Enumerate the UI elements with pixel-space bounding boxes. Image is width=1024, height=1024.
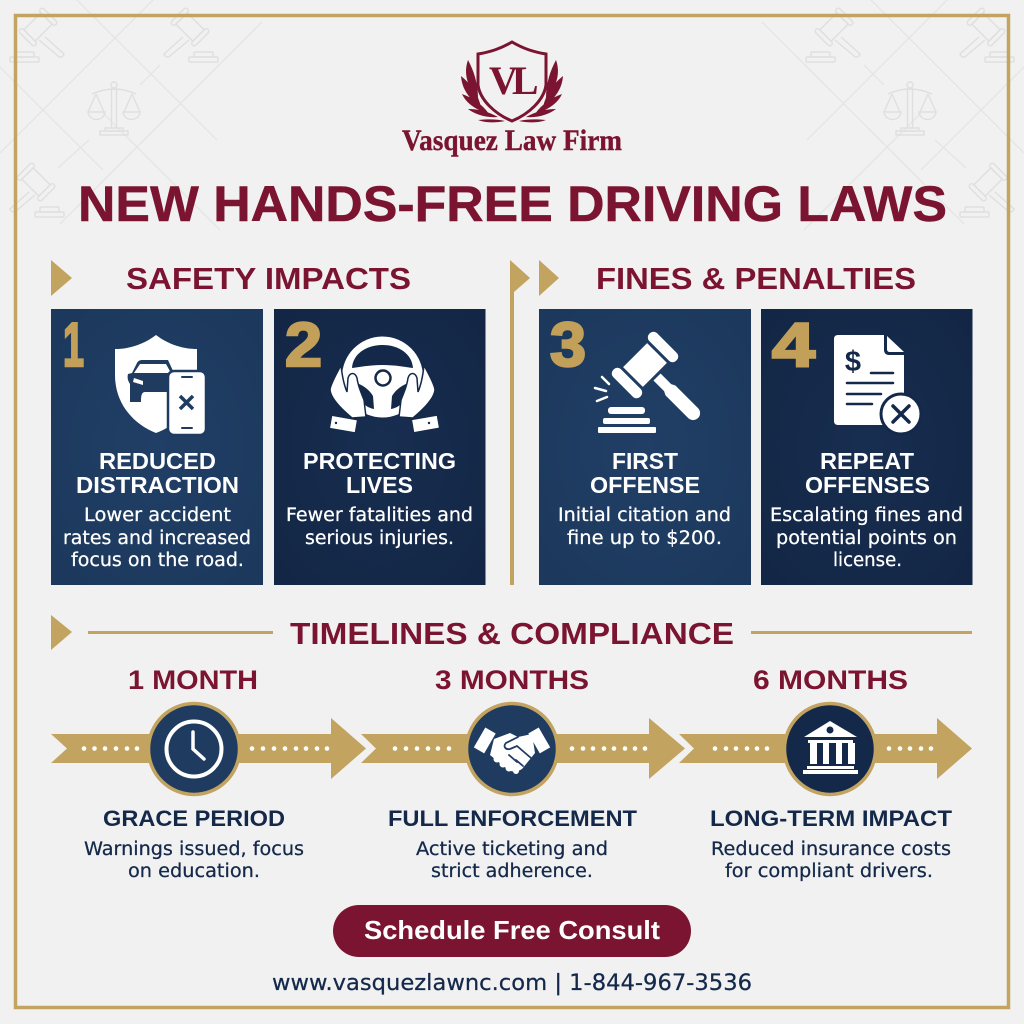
arrow 3 [679, 718, 972, 779]
icon: fine document with x: $ [845, 346, 861, 378]
background pattern: gavels and scales [0, 0, 1024, 230]
number 2: 2 [285, 311, 322, 380]
heading: fines and penalties: FINES & PENALTIES [596, 261, 916, 296]
section marker: fines and penalties [539, 260, 559, 296]
card description [558, 505, 731, 549]
panel: card 2 protecting lives [274, 309, 486, 585]
number 3: 3 [550, 311, 586, 380]
step 2: full enforcement: FULL ENFORCEMENT [388, 806, 638, 831]
month labels: 6 MONTHS [753, 665, 908, 695]
card description: potential points on [776, 528, 957, 549]
logo: Vasquez Law Firm [402, 42, 622, 157]
step 1: grace period: GRACE PERIOD [103, 806, 285, 831]
step 3: long-term impact [710, 806, 953, 882]
panel: card 1 reduced distraction [51, 309, 263, 585]
panel: card 3 first offense [539, 309, 751, 585]
month labels: 3 MONTHS [435, 665, 589, 695]
arrow 2 [361, 718, 685, 779]
icon: hands on steering wheel [330, 336, 439, 432]
step 3: long-term impact: Reduced insurance costs [711, 839, 951, 860]
icon: gavel [595, 330, 720, 440]
month labels [128, 665, 908, 695]
panel: card 4 repeat offenses [761, 309, 972, 585]
card description: Escalating fines and [770, 505, 963, 526]
card heading: REPEAT [820, 448, 914, 474]
step 2: full enforcement [388, 806, 638, 882]
arrow 1 [51, 718, 366, 779]
heading: safety impacts: SAFETY IMPACTS [126, 261, 411, 296]
icon: handshake [466, 704, 558, 794]
button: schedule free consult: Schedule Free Consult [364, 915, 660, 945]
panel: card 2 protecting lives: LIVES [346, 472, 413, 498]
card description: Lower accident [84, 505, 231, 526]
section marker: timelines [51, 615, 72, 650]
heading: timelines and compliance: TIMELINES & COMPLIANCE [290, 616, 734, 651]
center divider with marker [510, 260, 530, 585]
step 2: full enforcement: Active ticketing and [416, 839, 608, 860]
number 4: 4 [772, 311, 816, 380]
card description [286, 505, 473, 549]
step 1: grace period: on education. [128, 861, 260, 882]
card description: rates and increased [63, 528, 251, 549]
panel: card 3 first offense: OFFENSE [590, 472, 700, 498]
card description: Initial citation and [558, 505, 731, 526]
month labels: 1 MONTH [128, 665, 258, 695]
icon: shield and wings crest: VL [489, 58, 539, 103]
card heading: FIRST [612, 448, 678, 474]
card heading: PROTECTING [303, 448, 456, 474]
step 1: grace period [84, 806, 304, 882]
section marker: safety impacts [51, 260, 72, 296]
card description: fine up to $200. [567, 528, 722, 549]
icon: shield and wings crest [461, 42, 563, 122]
step 3: long-term impact: for compliant drivers. [725, 861, 933, 882]
icon: shield with car and phone [115, 335, 206, 435]
card description: Fewer fatalities and [286, 505, 473, 526]
panel: card 1 reduced distraction: DISTRACTION [76, 472, 239, 498]
step 2: full enforcement: strict adherence. [431, 861, 593, 882]
timeline heading rule left [88, 631, 273, 634]
number 1: 1 [63, 311, 84, 380]
panel: card 4 repeat offenses: OFFENSES [805, 472, 930, 498]
card description: focus on the road. [71, 550, 244, 571]
card description: serious injuries. [305, 528, 454, 549]
button: schedule free consult [333, 905, 691, 957]
card heading: REDUCED [99, 448, 216, 474]
icon: clock [148, 704, 240, 794]
card description: license. [833, 550, 902, 571]
firm name: Vasquez Law Firm [402, 124, 622, 157]
contact line: www.vasquezlawnc.com | 1-844-967-3536 [272, 971, 752, 996]
title: NEW HANDS-FREE DRIVING LAWS [78, 176, 947, 232]
icon: fine document with x [834, 335, 921, 434]
card description [63, 505, 251, 571]
card description [770, 505, 963, 571]
step 3: long-term impact: LONG-TERM IMPACT [710, 806, 953, 831]
step 1: grace period: Warnings issued, focus [84, 839, 304, 860]
timeline heading rule right [751, 631, 972, 634]
icon: bank building [784, 704, 876, 794]
